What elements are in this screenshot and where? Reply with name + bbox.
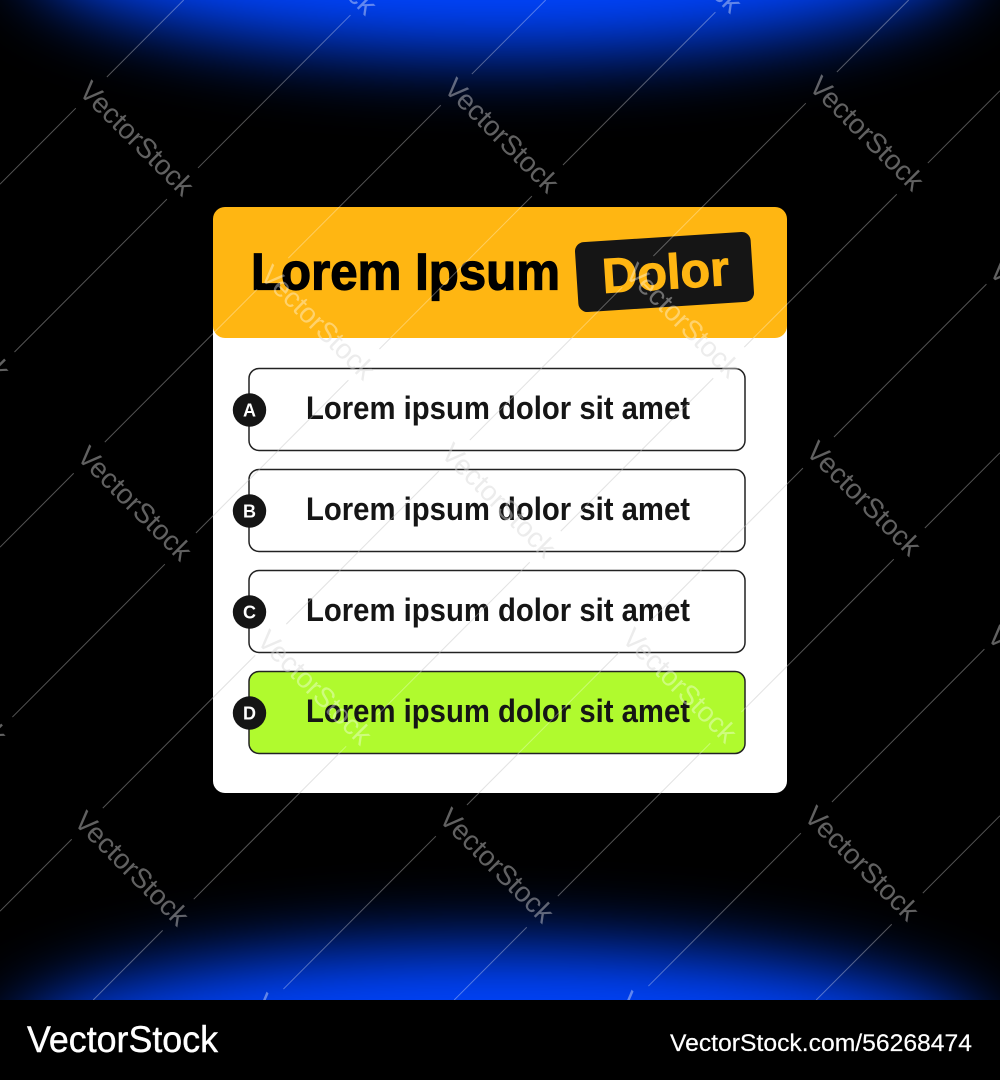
option C box: [249, 570, 745, 652]
option A letter: A: [243, 400, 256, 420]
text: VectorStock: [616, 622, 744, 749]
option C: [233, 570, 745, 652]
option D text: Lorem ipsum dolor sit amet: [306, 693, 690, 729]
footer bar: [0, 1000, 1000, 1080]
text: VectorStock: [619, 257, 747, 384]
card panel: [213, 207, 787, 793]
watermark text repeated across the image: VectorStock: [71, 440, 199, 567]
watermark text repeated across the image: VectorStock: [433, 802, 561, 929]
watermark text repeated across the image: VectorStock: [616, 622, 744, 749]
bottom blue glow: [8, 945, 992, 1080]
option D letter: D: [243, 704, 256, 724]
badge background: [574, 231, 755, 313]
option C marker: [233, 595, 266, 629]
option D marker: [233, 696, 266, 730]
watermark text repeated across the image: VectorStock: [798, 800, 926, 927]
watermark text repeated across the image: VectorStock: [254, 259, 382, 386]
watermark text repeated across the image: VectorStock: [619, 257, 747, 384]
option B box: [249, 470, 745, 552]
option A marker: [233, 393, 266, 427]
option B letter: B: [243, 502, 256, 522]
watermark text repeated across the image: Ve: [614, 985, 659, 1030]
option B: [233, 470, 745, 552]
heading: Lorem Ipsum: Lorem Ipsum: [251, 244, 560, 302]
card header band: [213, 207, 787, 338]
option D highlighted: [233, 672, 745, 754]
watermark text repeated across the image: VectorStock: [73, 75, 201, 202]
badge label: Dolor: [600, 242, 731, 304]
option D box: [249, 672, 745, 754]
watermark text repeated across the image: VectorStock: [438, 72, 566, 199]
watermark text repeated across the image: VectorStock: [251, 624, 379, 751]
option A box: [249, 368, 745, 450]
watermark text repeated across the image: VectorStock: [803, 70, 931, 197]
card body: [213, 300, 787, 793]
watermark text repeated across the image: VectorStock: [435, 437, 563, 564]
watermark text repeated across the image: VectorStock: [800, 435, 928, 562]
option A: [233, 368, 745, 450]
footer image id: VectorStock.com/56268474: [670, 1030, 972, 1057]
badge: Dolor: [574, 231, 755, 313]
text: VectorStock: [254, 259, 382, 386]
option C text: Lorem ipsum dolor sit amet: [306, 592, 690, 628]
footer logo text: VectorStock: [27, 1019, 218, 1060]
option B text: Lorem ipsum dolor sit amet: [306, 491, 690, 527]
watermark text repeated across the image: VectorStock: [68, 805, 196, 932]
text: VectorStock: [435, 437, 563, 564]
option B marker: [233, 494, 266, 528]
text: VectorStock: [251, 624, 379, 751]
footer background: [0, 1000, 1000, 1080]
option A text: Lorem ipsum dolor sit amet: [306, 390, 690, 426]
option C letter: C: [243, 602, 256, 622]
watermark text repeated across the image: Ve: [249, 987, 294, 1032]
top blue glow: [25, 0, 975, 55]
